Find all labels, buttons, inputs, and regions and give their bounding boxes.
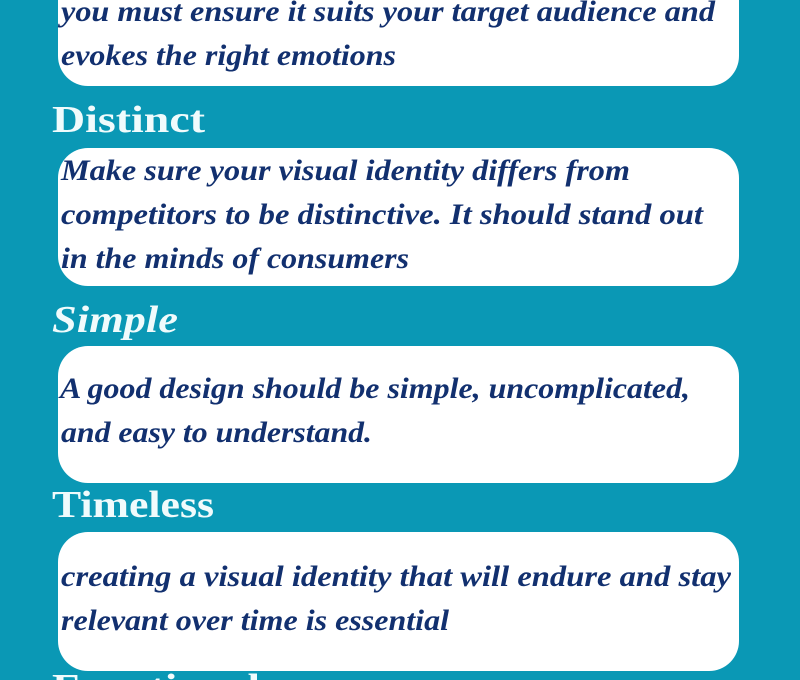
- panel: distinct: in the minds of consumers: [61, 242, 409, 275]
- heading: Simple: Simple: [52, 299, 178, 341]
- panel: distinct: competitors to be distinctive. It should stand out: [61, 198, 705, 231]
- panel: suitable: [58, 0, 739, 86]
- heading: Timeless: Timeless: [52, 484, 214, 526]
- panel: simple: and easy to understand.: [61, 416, 372, 449]
- panel: timeless: [58, 532, 739, 671]
- panel: suitable: evokes the right emotions: [61, 39, 396, 72]
- panel: timeless: creating a visual identity that will endure and stay: [61, 560, 732, 593]
- panel: distinct: Make sure your visual identity differs from: [60, 154, 630, 187]
- panel: simple: A good design should be simple, uncomplicated,: [58, 372, 690, 405]
- panel: simple: [58, 346, 739, 483]
- heading: Distinct: Distinct: [52, 99, 205, 141]
- panel: timeless: relevant over time is essential: [61, 604, 450, 637]
- panel: distinct: [58, 148, 739, 286]
